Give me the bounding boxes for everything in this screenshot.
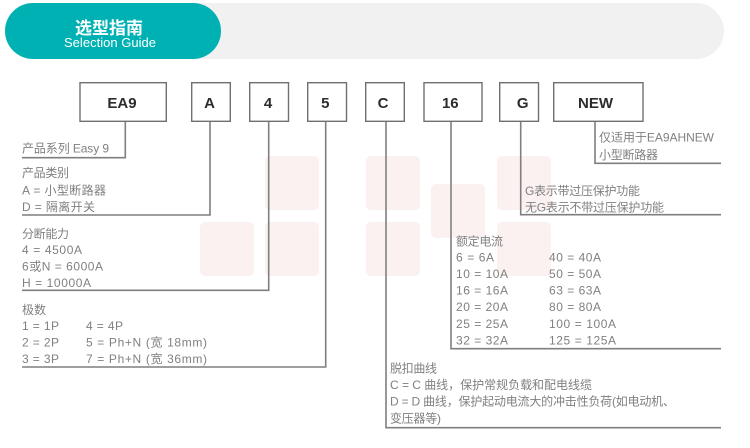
- code box: A: [192, 83, 230, 121]
- text: trip curve: 变压器等): [390, 410, 441, 425]
- text: G note: [525, 184, 664, 215]
- text: rated current: 6 = 6A: [456, 251, 494, 265]
- text: rated current: 80 = 80A: [549, 300, 601, 314]
- leader line: 4: [22, 121, 269, 290]
- leader line: EA9: [22, 121, 125, 158]
- leader line: A: [22, 121, 210, 215]
- text: poles: [22, 302, 207, 366]
- text: rated current: 125 = 125A: [549, 334, 616, 348]
- text: breaking capacity: H = 10000A: [22, 276, 91, 290]
- text: trip curve: 脱扣曲线: [390, 360, 437, 375]
- code box: G: [500, 83, 538, 121]
- text: rated current: 10 = 10A: [456, 267, 508, 281]
- text: trip curve: [390, 360, 675, 425]
- code box: EA9: EA9: [107, 95, 137, 112]
- text: product type: D = 隔离开关: [22, 199, 95, 214]
- text: product type: A = 小型断路器: [22, 182, 106, 198]
- title pill: 选型指南: [75, 19, 143, 38]
- text: trip curve: C = C 曲线，保护常规负载和配电线缆: [390, 377, 592, 392]
- text: rated current: 32 = 32A: [456, 334, 508, 348]
- leader line: C: [386, 121, 721, 428]
- title pill: [5, 3, 221, 59]
- code box: 4: [250, 83, 288, 121]
- text: product type: [22, 166, 106, 214]
- text: rated current: 50 = 50A: [549, 267, 601, 281]
- text: breaking capacity: [22, 226, 103, 290]
- text: product type: 产品类别: [22, 166, 69, 180]
- leader line: 5: [22, 121, 326, 367]
- text: NEW note: 小型断路器: [599, 147, 658, 162]
- leader line: G: [521, 121, 721, 215]
- text: poles: 极数: [22, 302, 46, 317]
- code box: G: G: [517, 95, 529, 112]
- text: poles: 3 = 3P: [22, 352, 59, 366]
- text: rated current: 100 = 100A: [549, 317, 616, 331]
- text: rated current: 25 = 25A: [456, 317, 508, 331]
- title pill: Selection Guide: [64, 35, 156, 50]
- text: poles: 5 = Ph+N (宽 18mm): [86, 334, 207, 350]
- text: rated current: 20 = 20A: [456, 300, 508, 314]
- text: rated current: 40 = 40A: [549, 251, 601, 265]
- leader line: NEW: [595, 121, 721, 163]
- text: NEW note: [599, 131, 715, 162]
- code box: EA9: [80, 83, 166, 121]
- code box: 5: 5: [321, 95, 329, 112]
- text: product series: 产品系列 Easy 9: [22, 142, 109, 156]
- text: G note: G表示带过压保护功能: [525, 184, 640, 198]
- text: breaking capacity: 6或N = 6000A: [22, 260, 103, 274]
- code box: 5: [308, 83, 346, 121]
- text: trip curve: D = D 曲线，保护起动电流大的冲击性负荷(如电动机、: [390, 394, 675, 409]
- code box: NEW: NEW: [578, 95, 614, 112]
- text: rated current: 63 = 63A: [549, 284, 601, 298]
- text: rated current: [456, 234, 616, 348]
- text: poles: 2 = 2P: [22, 336, 59, 350]
- text: rated current: 额定电流: [456, 234, 503, 249]
- text: NEW note: 仅适用于EA9AHNEW: [599, 131, 715, 145]
- text: rated current: 16 = 16A: [456, 284, 508, 298]
- code box: 4: 4: [264, 95, 273, 112]
- header bar: [5, 3, 724, 59]
- code box: 16: [424, 83, 482, 121]
- code box: 16: 16: [442, 95, 459, 112]
- text: poles: 1 = 1P: [22, 319, 59, 333]
- leader line: 16: [451, 121, 721, 349]
- text: breaking capacity: 分断能力: [22, 226, 69, 241]
- background watermark squares: [200, 156, 551, 276]
- code box: C: C: [378, 95, 389, 112]
- code box: NEW: [554, 83, 643, 121]
- text: breaking capacity: 4 = 4500A: [22, 243, 82, 257]
- code box: A: A: [204, 95, 215, 112]
- text: poles: 4 = 4P: [86, 319, 123, 333]
- text: G note: 无G表示不带过压保护功能: [525, 201, 664, 215]
- code box: C: [366, 83, 404, 121]
- text: poles: 7 = Ph+N (宽 36mm): [86, 351, 207, 366]
